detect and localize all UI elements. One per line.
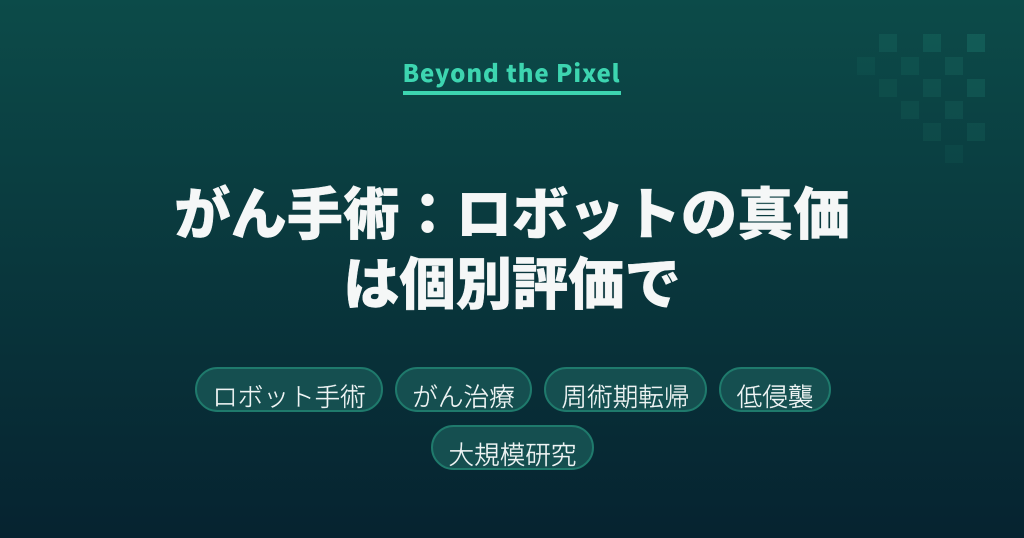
decorative pixel grid xyxy=(879,34,985,141)
tag: ロボット手術 xyxy=(195,367,383,412)
tag: 大規模研究 xyxy=(431,425,594,470)
brand label: Beyond the Pixel: Beyond the Pixel xyxy=(402,54,621,89)
tag: 周術期転帰 xyxy=(544,367,707,412)
tag: 大規模研究: 大規模研究 xyxy=(448,435,576,472)
tag list xyxy=(195,367,831,472)
tag: 周術期転帰: 周術期転帰 xyxy=(562,377,689,414)
title: がん手術：ロボットの真価 xyxy=(174,170,850,251)
tag: 低侵襲 xyxy=(719,367,831,412)
title: は個別評価で xyxy=(343,240,681,321)
title xyxy=(174,170,850,321)
tag: がん治療: がん治療 xyxy=(412,377,515,414)
tag: 低侵襲: 低侵襲 xyxy=(737,377,813,414)
tag: ロボット手術: ロボット手術 xyxy=(212,377,366,414)
tag: がん治療 xyxy=(395,367,532,412)
